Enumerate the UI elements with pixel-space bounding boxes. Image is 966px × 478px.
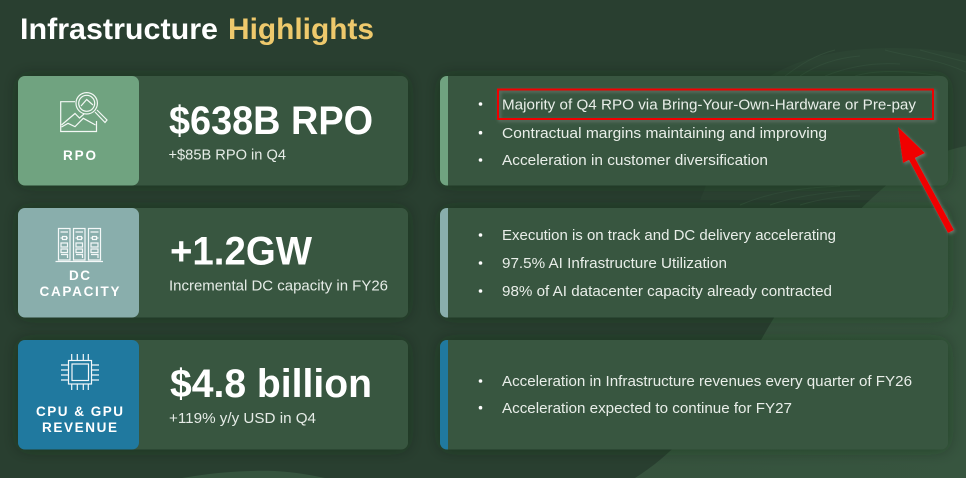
title: Infrastructure: [20, 13, 218, 46]
subtext: Incremental DC capacity in FY26: [169, 278, 388, 294]
bullet list: [479, 97, 917, 169]
icon: server racks: [56, 228, 103, 262]
arrow: red pointer: [898, 127, 954, 233]
callout: red highlight box: [498, 90, 933, 119]
label: CPU & GPU: [36, 404, 123, 419]
panel: DC capacity metric: [18, 208, 408, 318]
icon: magnifier over chart: [61, 93, 107, 132]
bullet list: 97.5% AI Infrastructure Utilization: [502, 256, 727, 272]
bullet list: Acceleration in customer diversification: [502, 153, 768, 169]
icon tile: CPU and GPU revenue: [18, 340, 139, 450]
icon tile: DC capacity: [18, 208, 139, 318]
label: RPO: [63, 148, 96, 163]
title: Highlights: [228, 13, 374, 46]
subtext: +$85B RPO in Q4: [168, 148, 286, 164]
bullet list: 98% of AI datacenter capacity already contracted: [502, 284, 832, 300]
value: $638B RPO: $638B RPO: [169, 99, 373, 143]
bullet list: Acceleration expected to continue for FY27: [502, 401, 792, 417]
subtext: +119% y/y USD in Q4: [169, 411, 316, 427]
bullet list: Execution is on track and DC delivery accelerating: [502, 228, 836, 244]
bullet list: [479, 228, 836, 300]
icon tile: RPO: [18, 76, 139, 186]
bullet list: Acceleration in Infrastructure revenues every quarter of FY26: [502, 374, 912, 390]
title: [20, 13, 374, 46]
label: DC: [69, 268, 90, 283]
panel: CPU and GPU revenue metric: [18, 340, 408, 450]
panel: RPO details: [440, 76, 948, 186]
panel: DC capacity details: [440, 208, 948, 318]
icon: processor chip: [61, 354, 99, 390]
panel: RPO metric: [18, 76, 408, 186]
bullet list: Contractual margins maintaining and improving: [502, 126, 827, 142]
icon tile: CPU and GPU revenue: REVENUE: [42, 420, 117, 435]
icon tile: DC capacity: CAPACITY: [40, 284, 120, 299]
panel: revenue details: [440, 340, 948, 450]
bullet list: [479, 374, 912, 417]
value: $4.8 billion: $4.8 billion: [170, 362, 372, 406]
value: +1.2GW: +1.2GW: [170, 230, 312, 274]
bullet list: Majority of Q4 RPO via Bring-Your-Own-Hardware or Pre-pay: [502, 97, 917, 113]
